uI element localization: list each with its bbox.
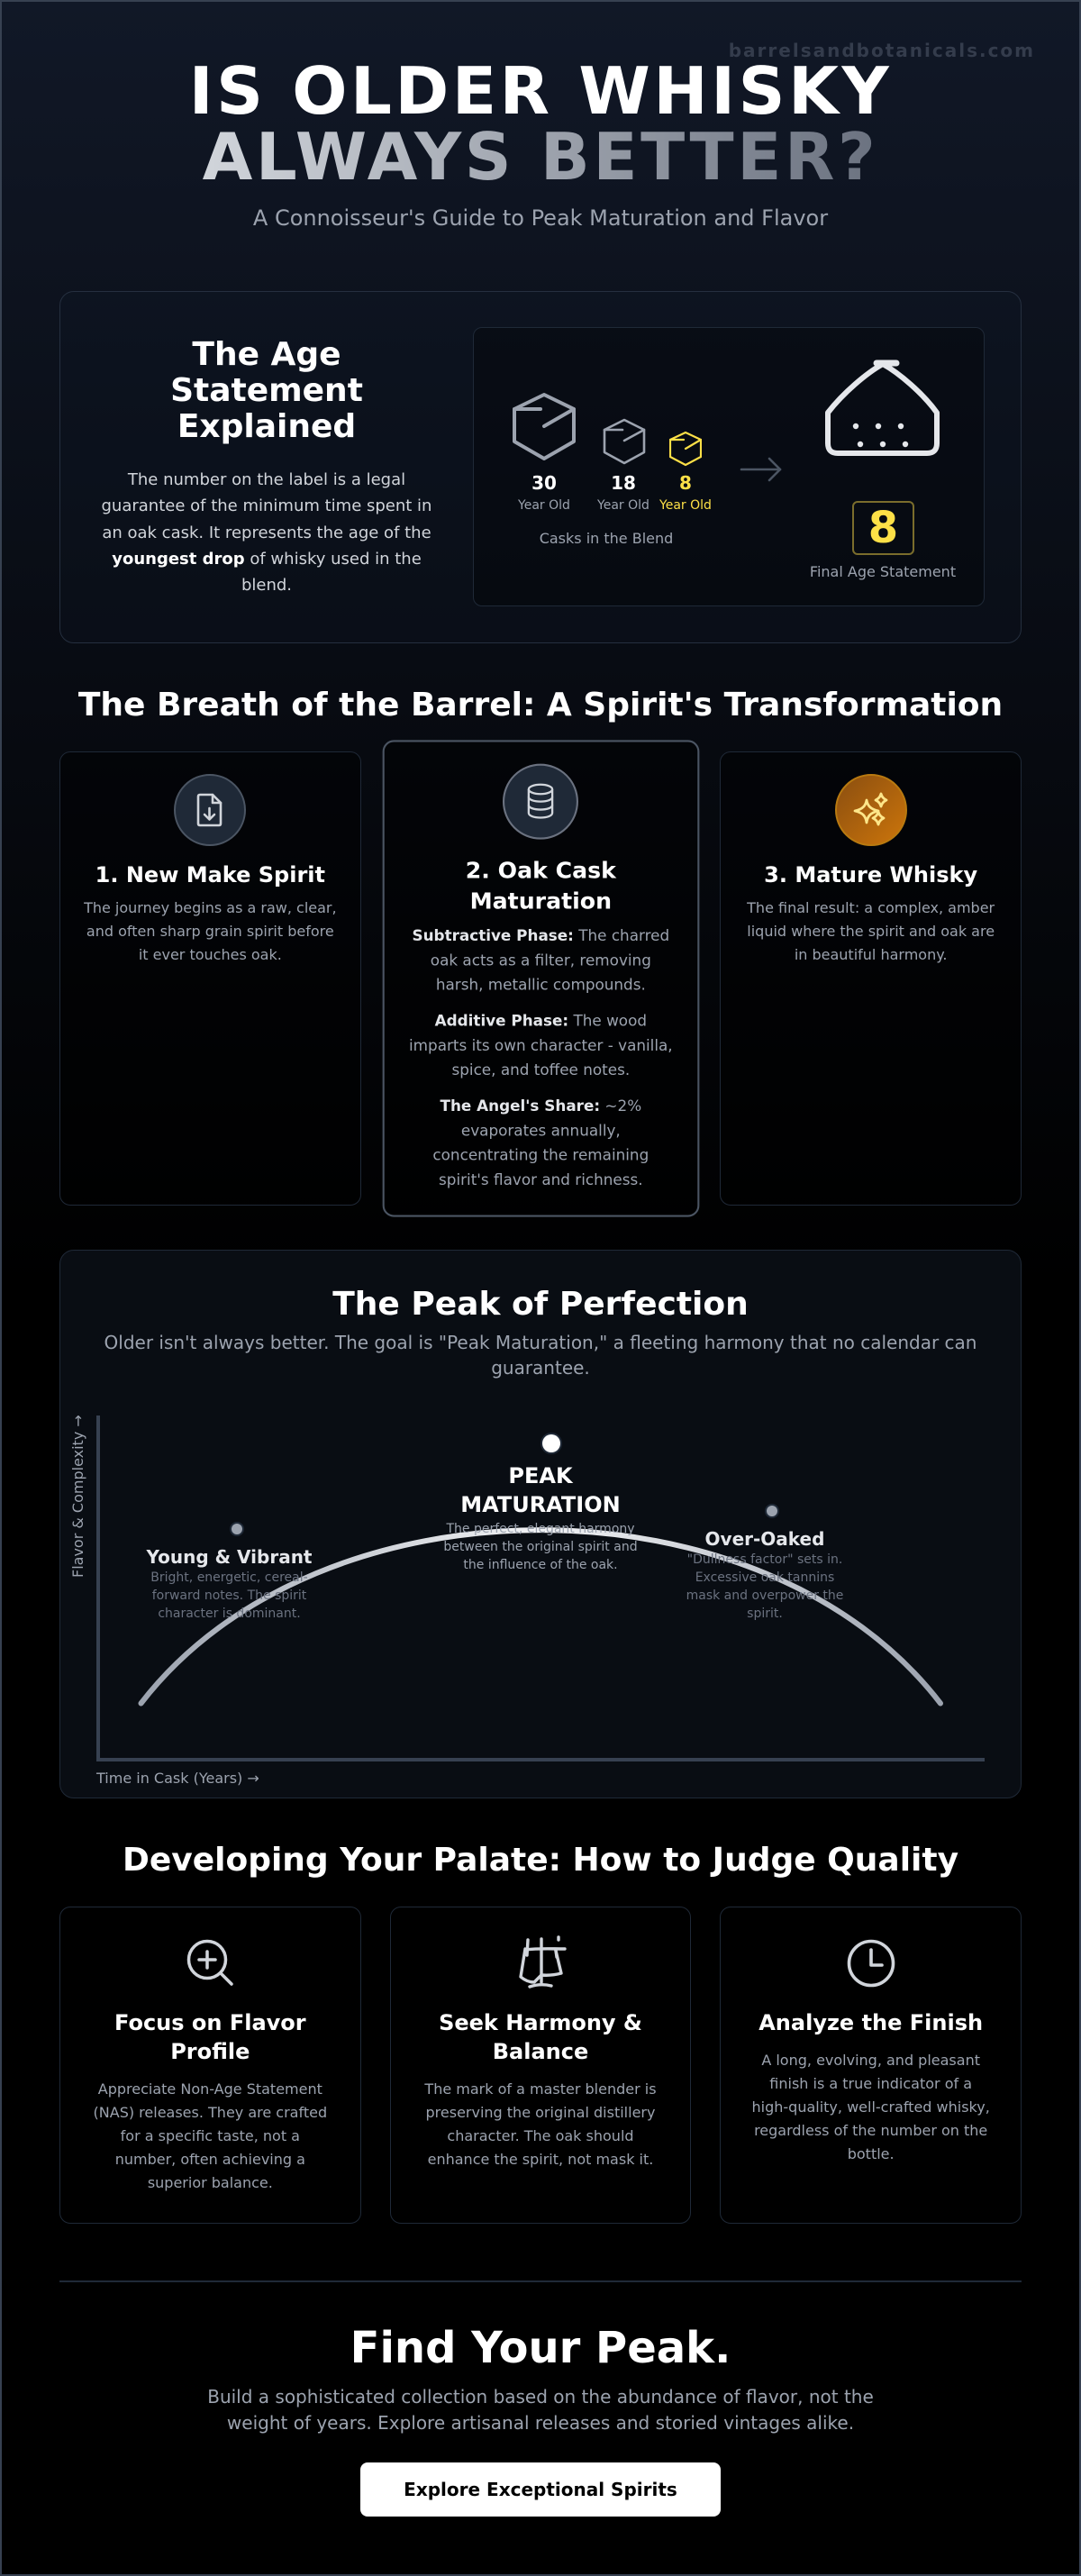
arrow (740, 458, 782, 481)
label: young and vibrant (146, 1546, 312, 1621)
label: y axis: Flavor & Complexity → (69, 1415, 86, 1578)
heading: age statement: Explained (177, 408, 356, 445)
text: step 2 phases: imparts its own character - vanilla, (409, 1036, 672, 1054)
text: step 2 phases: spirit's flavor and richness. (439, 1170, 642, 1188)
icon: database (503, 764, 578, 840)
label: peak maturation: PEAK (508, 1463, 573, 1488)
label: 8 year old: Year Old (659, 498, 712, 513)
button: explore (360, 2462, 721, 2517)
point: young (232, 1524, 242, 1534)
panel: peak of perfection (59, 1250, 1022, 1798)
label: x axis: Time in Cask (Years) → (96, 1770, 259, 1787)
heading: age statement: Statement (170, 372, 363, 409)
heading: step 2: Maturation (469, 887, 612, 915)
icon: magnifier (187, 1939, 233, 1986)
chart: maturation curve (69, 1415, 985, 1787)
label: 30 year old: 30 (531, 472, 557, 494)
label: 18 year old: Year Old (597, 498, 650, 513)
text: closing: weight of years. Explore artisanal releases and storied vintages alike. (227, 2411, 854, 2433)
text: step 3: liquid where the spirit and oak are (747, 923, 995, 940)
text: step 1: The journey begins as a raw, clear, (84, 899, 337, 916)
text: closing (207, 2386, 874, 2433)
text: step 2 phases: evaporates annually, (461, 1122, 620, 1139)
heading: tip 2: Balance (493, 2039, 588, 2064)
text: step 2 phases (409, 926, 672, 1188)
text: peak intro: guarantee. (491, 1357, 590, 1379)
icon: bottle (825, 360, 940, 456)
text: step 2 phases: Subtractive Phase: The charred (412, 926, 669, 944)
label: young and vibrant: Young & Vibrant (146, 1546, 312, 1568)
icon: sparkles (835, 774, 907, 846)
panel: new make spirit (59, 751, 361, 1206)
text: tip 2: preserving the original distillery (425, 2104, 655, 2121)
text: step 3: The final result: a complex, amber (747, 899, 995, 916)
text: step 2 phases: harsh, metallic compounds. (436, 976, 645, 994)
heading: step 3: 3. Mature Whisky (764, 862, 977, 887)
panel: cask diagram (473, 327, 985, 606)
text: step 1: and often sharp grain spirit before (86, 923, 334, 940)
text: tip 3: high-quality, well-crafted whisky, (751, 2098, 990, 2116)
badge: final age (852, 501, 914, 555)
point: peak (542, 1434, 560, 1452)
point: over-oaked (767, 1506, 777, 1516)
label: 18 year old: 18 (611, 472, 636, 494)
text: step 2 phases: The Angel's Share: ~2% (440, 1097, 641, 1115)
heading: tip 3: Analyze the Finish (759, 2010, 983, 2035)
curve (139, 1527, 943, 1707)
label: 30 year old (518, 472, 570, 513)
icon: 30 year cask (513, 393, 577, 460)
text: tip 3: finish is a true indicator of a (769, 2075, 972, 2092)
subtitle: A Connoisseur's Guide to Peak Maturation and Flavor (253, 205, 828, 231)
label: young and vibrant: Bright, energetic, cereal- (150, 1570, 308, 1585)
text: step 1: it ever touches oak. (139, 946, 282, 963)
label: over-oaked: Over-Oaked (705, 1528, 824, 1550)
heading: tip 1: Profile (170, 2039, 250, 2064)
text: tip 2: enhance the spirit, not mask it. (428, 2151, 653, 2168)
text: step 2 phases: concentrating the remaining (432, 1146, 649, 1164)
heading: transformation: The Breath of the Barrel: A Spirit's Transformation (78, 687, 1003, 724)
icon: scales (519, 1935, 567, 1989)
text: tip 2: character. The oak should (447, 2127, 634, 2144)
heading: age statement: The Age (192, 336, 341, 373)
text: tip 1: superior balance. (148, 2174, 273, 2191)
label: casks in the blend: Casks in the Blend (540, 530, 673, 547)
icon: file (174, 774, 246, 846)
text: age statement explanation: an oak cask. It represents the age of the (102, 523, 431, 542)
text: peak intro (104, 1332, 977, 1379)
text: age statement explanation: blend. (241, 576, 292, 595)
text: peak intro: Older isn't always better. The goal is "Peak Maturation," a fleeting harmony that no calendar can (104, 1332, 977, 1353)
label: over-oaked: "Dullness factor" sets in. (687, 1552, 842, 1567)
heading: find your peak: Find Your Peak. (350, 2323, 731, 2373)
heading: step 2 (465, 858, 616, 915)
chart axes (96, 1415, 985, 1761)
text: tip 1: (NAS) releases. They are crafted (94, 2104, 327, 2121)
heading: tip 1: Focus on Flavor (114, 2010, 306, 2035)
title: IS OLDER WHISKY (189, 53, 892, 129)
label: 8 year old (659, 472, 712, 513)
panel: age statement (59, 291, 1022, 643)
text: tip 1: number, often achieving a (115, 2151, 305, 2168)
panel: harmony (390, 1907, 691, 2224)
icon: 8 year cask (669, 431, 702, 467)
title (189, 53, 892, 195)
text: closing: Build a sophisticated collection based on the abundance of flavor, not the (207, 2386, 874, 2408)
label: over-oaked: mask and overpower the (686, 1588, 843, 1603)
panel: flavor profile (59, 1907, 361, 2224)
text: step 2 phases: spice, and toffee notes. (451, 1060, 630, 1079)
heading: palate: Developing Your Palate: How to Judge Quality (123, 1842, 958, 1879)
label: 30 year old: Year Old (518, 498, 570, 513)
label: over-oaked: Excessive oak tannins (695, 1570, 834, 1585)
panel: oak cask maturation (382, 740, 699, 1217)
heading: tip 1 (114, 2010, 306, 2064)
label: peak maturation (443, 1463, 638, 1572)
heading: tip 2: Seek Harmony & (439, 2010, 642, 2035)
label: final age statement: Final Age Statement (810, 563, 956, 580)
text: tip 3 (751, 2052, 990, 2162)
badge: final age: 8 (868, 503, 898, 553)
heading: age statement (170, 336, 363, 445)
watermark: barrelsandbotanicals.com (729, 40, 1035, 61)
text: tip 3: bottle. (848, 2145, 895, 2162)
label: over-oaked (686, 1528, 843, 1621)
icon: 18 year cask (604, 418, 645, 465)
label: 18 year old (597, 472, 650, 513)
text: step 1 (84, 899, 337, 963)
label: young and vibrant: character is dominant. (158, 1607, 301, 1621)
text: age statement explanation (101, 470, 431, 595)
text: age statement explanation: youngest drop of whisky used in the (112, 550, 422, 569)
text: age statement explanation: guarantee of the minimum time spent in (101, 496, 431, 515)
text: step 3 (747, 899, 995, 963)
text: step 2 phases: Additive Phase: The wood (434, 1012, 647, 1030)
text: step 3: in beautiful harmony. (795, 946, 947, 963)
label: over-oaked: spirit. (747, 1607, 783, 1621)
text: tip 3: regardless of the number on the (754, 2122, 987, 2139)
label: 8 year old: 8 (679, 472, 692, 494)
text: step 2 phases: oak acts as a filter, removing (430, 951, 651, 969)
label: peak maturation: the influence of the oak. (463, 1558, 618, 1572)
heading: peak of perfection: The Peak of Perfection (332, 1286, 749, 1323)
heading: tip 2 (439, 2010, 642, 2064)
text: tip 2: The mark of a master blender is (424, 2080, 657, 2098)
title: ALWAYS BETTER? (203, 119, 878, 195)
label: peak maturation: MATURATION (460, 1492, 621, 1517)
panel: finish (720, 1907, 1022, 2224)
text: tip 1: Appreciate Non-Age Statement (98, 2080, 322, 2098)
text: tip 1 (94, 2080, 327, 2191)
text: tip 2 (424, 2080, 657, 2168)
button: explore: Explore Exceptional Spirits (404, 2479, 677, 2500)
label: peak maturation: between the original spirit and (443, 1540, 638, 1554)
text: tip 1: for a specific taste, not a (121, 2127, 300, 2144)
label: peak maturation: The perfect, elegant harmony (446, 1522, 635, 1536)
text: age statement explanation: The number on the label is a legal (128, 470, 405, 489)
icon: clock (847, 1939, 895, 1988)
panel: mature whisky (720, 751, 1022, 1206)
heading: step 2: 2. Oak Cask (465, 858, 616, 884)
text: tip 3: A long, evolving, and pleasant (761, 2052, 980, 2069)
heading: step 1: 1. New Make Spirit (95, 862, 325, 887)
label: young and vibrant: forward notes. The spirit (152, 1588, 306, 1603)
